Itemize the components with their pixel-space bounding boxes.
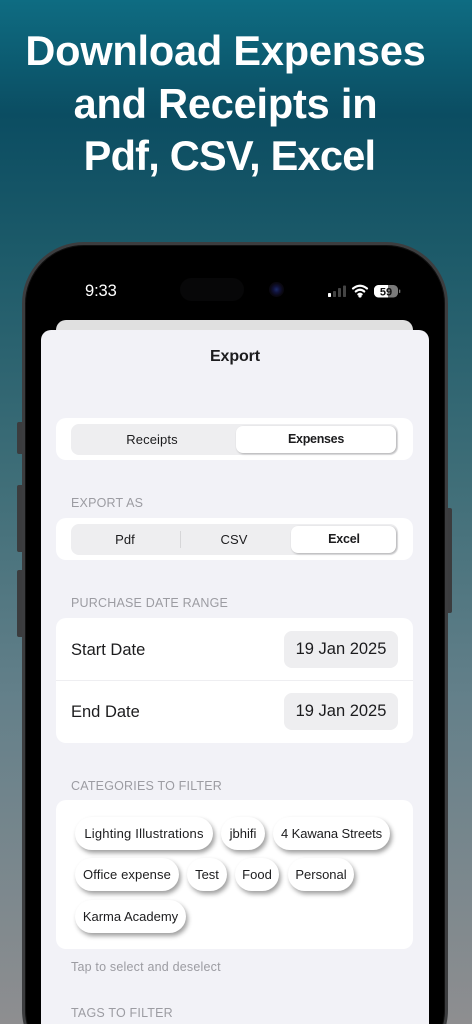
- phone device: [17, 242, 452, 1024]
- icon: battery: 59: [380, 286, 392, 298]
- background sheet: [56, 320, 413, 340]
- segmented control: receipts or expenses: [71, 424, 398, 455]
- category chips: Food: [242, 867, 272, 882]
- hint text: Tap to select and deselect: [71, 960, 221, 974]
- heading: categories to filter: CATEGORIES TO FILTER: [71, 779, 222, 793]
- category chips: Lighting Illustrations: [84, 826, 204, 841]
- right side button: [447, 508, 452, 613]
- title: and Receipts in: [74, 80, 377, 127]
- status icons: [328, 284, 400, 298]
- segmented control: receipts or expenses: Expenses: [288, 432, 344, 446]
- start date value: 19 Jan 2025: [296, 640, 386, 658]
- front camera: [269, 282, 284, 297]
- title: [25, 27, 426, 179]
- heading: purchase date range: PURCHASE DATE RANGE: [71, 596, 228, 610]
- category chips: Personal: [295, 867, 347, 882]
- icon: wifi: [353, 286, 367, 297]
- end date value: 19 Jan 2025: [296, 702, 386, 720]
- segmented control: format: [71, 524, 398, 555]
- segmented control: receipts or expenses: Receipts: [126, 432, 178, 447]
- panel: format selector: [56, 518, 413, 560]
- start date label: Start Date: [71, 641, 145, 659]
- title: Pdf, CSV, Excel: [84, 132, 375, 179]
- category chips: Office expense: [83, 867, 171, 882]
- category chips: jbhifi: [230, 826, 256, 841]
- title: Download Expenses: [25, 27, 426, 74]
- icon: signal: [328, 286, 346, 297]
- heading: tags to filter: TAGS TO FILTER: [71, 1006, 173, 1020]
- panel: categories: [56, 800, 413, 949]
- end date value: [284, 693, 398, 730]
- start date value: [284, 631, 398, 668]
- panel: type selector: [56, 418, 413, 460]
- category chips: Karma Academy: [83, 909, 178, 924]
- category chips: 4 Kawana Streets: [281, 826, 382, 841]
- status bar time: 9:33: [85, 282, 117, 300]
- phone body: [22, 242, 448, 1024]
- segmented control: format: Excel: [328, 532, 360, 546]
- category chips: Test: [195, 867, 219, 882]
- end date label: End Date: [71, 703, 140, 721]
- dynamic island: [180, 278, 244, 301]
- export sheet: [41, 330, 429, 1024]
- left side buttons: [17, 422, 22, 637]
- segmented control: format: Pdf: [115, 532, 135, 547]
- segmented control: format: CSV: [220, 532, 248, 547]
- category chips: [74, 817, 395, 939]
- heading: export as: EXPORT AS: [71, 496, 143, 510]
- panel: date range: [56, 618, 413, 743]
- sheet title: Export: [210, 348, 260, 365]
